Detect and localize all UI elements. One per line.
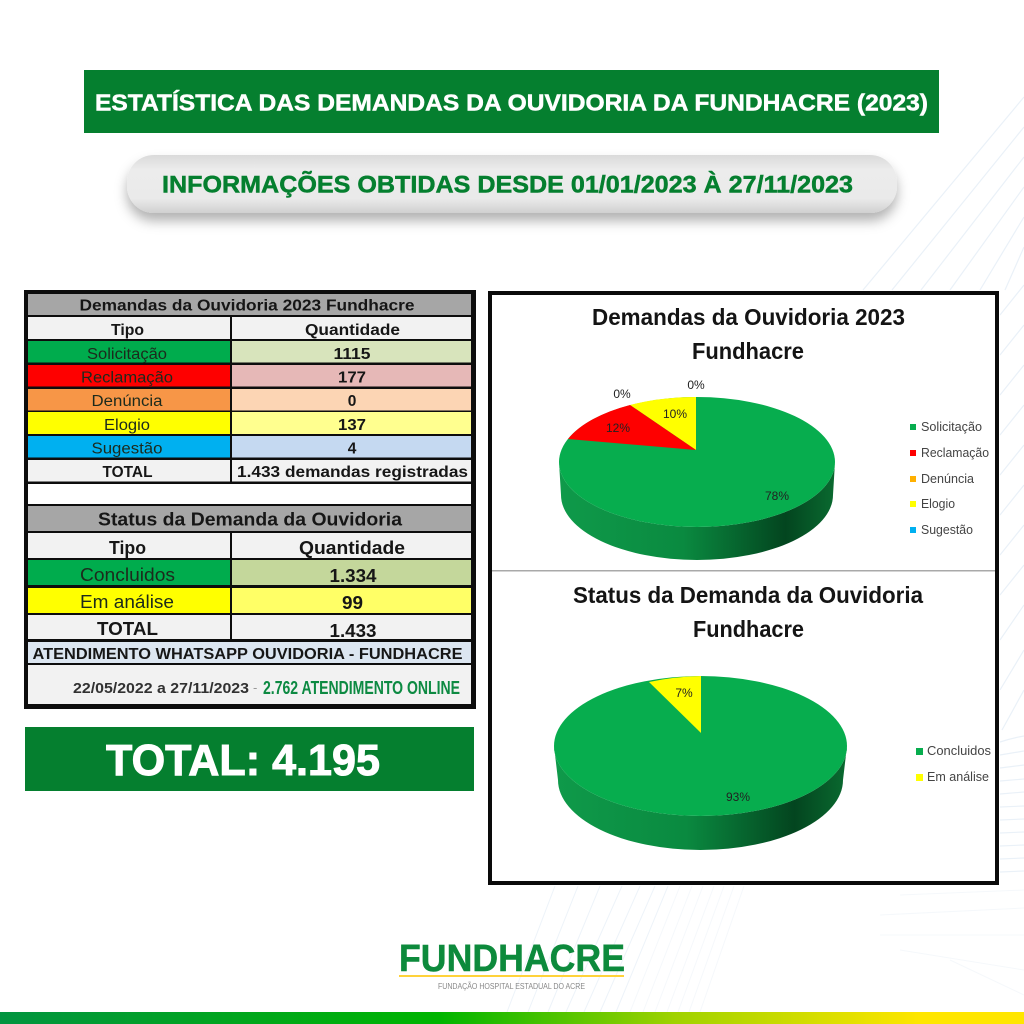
row: Sugestão: 4 <box>348 440 357 458</box>
row: Elogio <box>28 412 471 434</box>
legend: demandas: Sugestão <box>921 523 973 537</box>
pie chart: status: 93% <box>726 790 750 804</box>
row: status headers <box>28 533 471 558</box>
pie chart: demandas: 12% <box>606 421 630 435</box>
legend: demandas: Elogio <box>921 497 955 511</box>
row: Solicitação <box>28 341 471 363</box>
legend: demandas <box>910 420 989 537</box>
chart title: demandas: Fundhacre <box>692 338 804 364</box>
subtitle pill: INFORMAÇÕES OBTIDAS DESDE 01/01/2023 À 27/11/2023 <box>162 170 853 198</box>
row: total status: TOTAL <box>97 619 158 639</box>
row: Reclamação: 177 <box>338 370 366 386</box>
table heading: status: Status da Demanda da Ouvidoria <box>98 510 403 530</box>
legend: demandas: Reclamação <box>921 446 989 460</box>
row: Elogio: Elogio <box>104 417 150 434</box>
table heading: demandas: Demandas da Ouvidoria 2023 Fundhacre <box>80 298 415 314</box>
row: Em análise <box>28 588 471 613</box>
title banner: ESTATÍSTICA DAS DEMANDAS DA OUVIDORIA DA FUNDHACRE (2023) <box>95 88 928 116</box>
logo: Fundhacre: FUNDAÇÃO HOSPITAL ESTADUAL DO ACRE <box>438 982 585 991</box>
legend: demandas: Denúncia <box>921 472 974 486</box>
row: Concluidos: Concluidos <box>80 565 175 585</box>
pie chart: demandas: 0% <box>687 378 705 392</box>
row: Concluidos <box>28 560 471 586</box>
pie chart: demandas: 10% <box>663 407 687 421</box>
chart title: demandas <box>592 304 905 364</box>
total banner: TOTAL: 4.195 <box>106 736 380 785</box>
footer gradient bar <box>0 1012 1024 1024</box>
row: total status <box>28 615 471 641</box>
logo: Fundhacre: FUNDHACRE <box>399 938 625 980</box>
row: Reclamação <box>28 365 471 386</box>
title banner <box>84 70 939 133</box>
row: Em análise: 99 <box>342 593 363 613</box>
table heading: demandas <box>28 294 471 315</box>
pie chart: demandas: 78% <box>765 489 789 503</box>
row: total demandas: 1.433 demandas registradas <box>237 464 468 481</box>
panel: charts <box>490 293 997 883</box>
total banner <box>25 727 474 791</box>
row: Denúncia: 0 <box>348 393 356 410</box>
legend: status: Em análise <box>927 770 989 784</box>
row: column headers: Quantidade <box>305 322 400 339</box>
legend: status: Concluidos <box>927 744 991 758</box>
legend: status <box>916 744 991 784</box>
row: Denúncia <box>28 389 471 410</box>
chart title: status <box>573 582 923 642</box>
row: whatsapp online count <box>28 665 471 704</box>
chart title: status: Status da Demanda da Ouvidoria <box>573 582 923 608</box>
pie chart: demandas <box>559 378 835 560</box>
row: whatsapp online count: 22/05/2022 a 27/11/2023 <box>73 680 249 697</box>
chart title: status: Fundhacre <box>693 616 804 642</box>
row: column headers: Tipo <box>111 322 144 339</box>
row: status headers: Tipo <box>109 538 146 558</box>
row: total status: 1.433 <box>330 621 376 641</box>
row: Elogio: 137 <box>338 417 366 434</box>
table heading: status <box>28 506 471 531</box>
subtitle pill <box>127 155 897 213</box>
row: Solicitação: 1115 <box>334 346 371 363</box>
panel: data tables <box>24 290 476 709</box>
row: total demandas: TOTAL <box>102 464 152 481</box>
row: Sugestão: Sugestão <box>92 440 162 458</box>
pie chart: demandas: 0% <box>613 387 631 401</box>
row: whatsapp heading: ATENDIMENTO WHATSAPP OUVIDORIA - FUNDHACRE <box>32 646 462 663</box>
row: Solicitação: Solicitação <box>87 346 167 363</box>
row: Em análise: Em análise <box>80 592 174 612</box>
row: status headers: Quantidade <box>299 538 405 558</box>
row: Denúncia: Denúncia <box>92 393 163 410</box>
pie chart: status <box>554 676 847 850</box>
row: Sugestão <box>28 436 471 458</box>
row: total demandas <box>28 460 471 482</box>
row: Concluidos: 1.334 <box>330 566 376 586</box>
pie chart: status: 7% <box>675 686 693 700</box>
row: whatsapp online count: 2.762 ATENDIMENTO ONLINE <box>263 678 460 698</box>
row: Reclamação: Reclamação <box>81 370 173 386</box>
row: column headers <box>28 317 471 339</box>
legend: demandas: Solicitação <box>921 420 982 434</box>
row: whatsapp online count: - <box>253 680 257 695</box>
chart title: demandas: Demandas da Ouvidoria 2023 <box>592 304 905 330</box>
